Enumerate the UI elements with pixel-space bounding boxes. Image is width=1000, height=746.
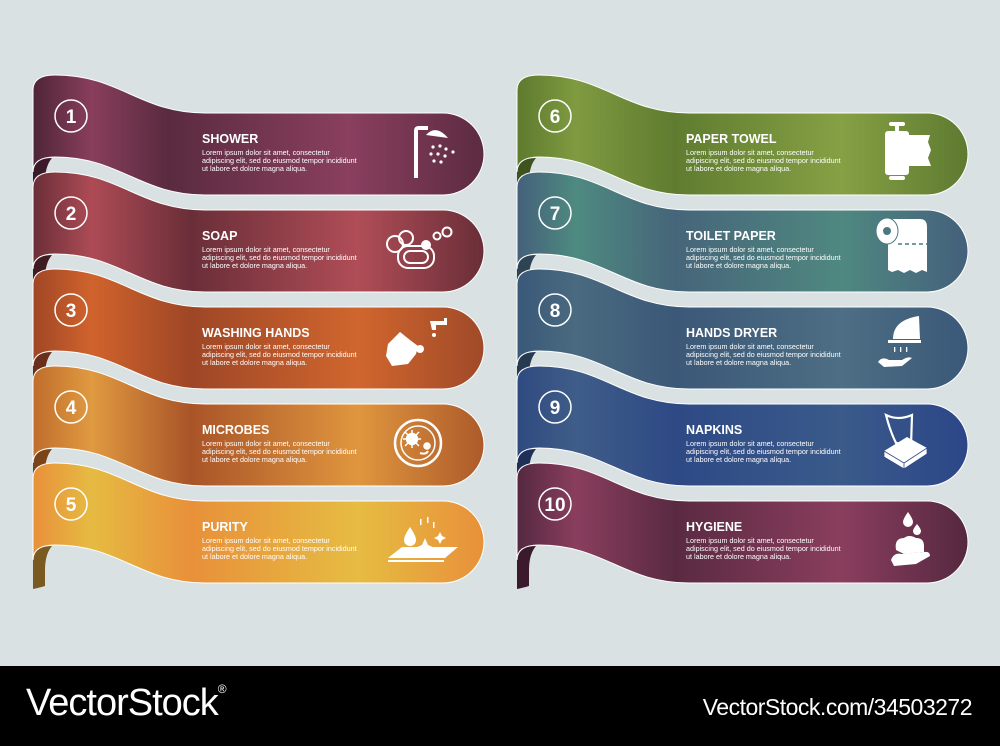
icon: soap xyxy=(387,228,452,268)
ribbon 9: napkins: Lorem ipsum dolor sit amet, consectetur xyxy=(686,439,814,448)
ribbon 6: paper towel: Lorem ipsum dolor sit amet, consectetur xyxy=(686,148,814,157)
footer bar xyxy=(0,666,1000,746)
icon: napkins box xyxy=(884,415,927,469)
icon: purity xyxy=(388,517,458,562)
ribbon 5: purity: Lorem ipsum dolor sit amet, consectetur xyxy=(202,536,330,545)
ribbon 4: microbes: 4 xyxy=(66,398,77,419)
ribbon 10: hygiene: adipiscing elit, sed do eiusmod tempor incididunt xyxy=(686,544,841,553)
ribbon 1: shower xyxy=(33,75,484,201)
ribbon 10: hygiene: 10 xyxy=(544,495,566,516)
ribbon 3: washing hands xyxy=(33,269,484,395)
ribbon 2: soap: Lorem ipsum dolor sit amet, consectetur xyxy=(202,245,330,254)
ribbon 8: hands dryer: Lorem ipsum dolor sit amet, consectetur xyxy=(686,342,814,351)
ribbon 10: hygiene: HYGIENE xyxy=(686,520,742,534)
ribbon 9: napkins: 9 xyxy=(550,398,560,419)
ribbon 5: purity: ut labore et dolore magna aliqua. xyxy=(202,552,307,561)
ribbon 7: toilet paper: Lorem ipsum dolor sit amet, consectetur xyxy=(686,245,814,254)
ribbon 10: hygiene: ut labore et dolore magna aliqua. xyxy=(686,552,791,561)
footer url: VectorStock.com/34503272 xyxy=(703,694,972,720)
ribbon 4: microbes: ut labore et dolore magna aliqua. xyxy=(202,455,307,464)
icon: hygiene xyxy=(891,512,930,566)
ribbon 2: soap xyxy=(33,172,484,298)
icon: microbes petri dish xyxy=(395,420,441,466)
ribbon 6: paper towel: PAPER TOWEL xyxy=(686,132,777,146)
ribbon 7: toilet paper xyxy=(517,172,968,298)
ribbon 5: purity: adipiscing elit, sed do eiusmod tempor incididunt xyxy=(202,544,357,553)
ribbon 8: hands dryer xyxy=(517,269,968,395)
icon: shower xyxy=(414,126,455,178)
ribbon 8: hands dryer: 8 xyxy=(550,301,560,322)
ribbon 8: hands dryer: HANDS DRYER xyxy=(686,326,777,340)
ribbon 7: toilet paper: adipiscing elit, sed do eiusmod tempor incididunt xyxy=(686,253,841,262)
ribbon 6: paper towel xyxy=(517,75,968,201)
ribbon 6: paper towel: ut labore et dolore magna aliqua. xyxy=(686,164,791,173)
ribbon 7: toilet paper: TOILET PAPER xyxy=(686,229,776,243)
icon: hands dryer xyxy=(878,316,921,367)
ribbon 1: shower: SHOWER xyxy=(202,132,258,146)
ribbon 2: soap: ut labore et dolore magna aliqua. xyxy=(202,261,307,270)
ribbon 9: napkins: ut labore et dolore magna aliqua. xyxy=(686,455,791,464)
ribbon 6: paper towel: adipiscing elit, sed do eiusmod tempor incididunt xyxy=(686,156,841,165)
ribbon 7: toilet paper: ut labore et dolore magna aliqua. xyxy=(686,261,791,270)
icon: washing hands xyxy=(386,318,447,366)
ribbon 4: microbes: Lorem ipsum dolor sit amet, consectetur xyxy=(202,439,330,448)
ribbon 4: microbes: adipiscing elit, sed do eiusmod tempor incididunt xyxy=(202,447,357,456)
ribbon 1: shower: Lorem ipsum dolor sit amet, consectetur xyxy=(202,148,330,157)
icon: toilet paper xyxy=(876,218,927,273)
ribbon 2: soap: adipiscing elit, sed do eiusmod tempor incididunt xyxy=(202,253,357,262)
ribbon 4: microbes: MICROBES xyxy=(202,423,269,437)
ribbon 10: hygiene xyxy=(517,463,968,589)
ribbon 10: hygiene: Lorem ipsum dolor sit amet, consectetur xyxy=(686,536,814,545)
ribbon 9: napkins xyxy=(517,366,968,492)
ribbon 1: shower: adipiscing elit, sed do eiusmod tempor incididunt xyxy=(202,156,357,165)
footer logo: VectorStock® xyxy=(26,682,226,724)
ribbon 5: purity xyxy=(33,463,484,589)
ribbon 3: washing hands: Lorem ipsum dolor sit amet, consectetur xyxy=(202,342,330,351)
ribbon 5: purity: 5 xyxy=(66,495,77,516)
ribbon 2: soap: SOAP xyxy=(202,229,237,243)
ribbon 8: hands dryer: ut labore et dolore magna aliqua. xyxy=(686,358,791,367)
ribbon 1: shower: 1 xyxy=(66,107,77,128)
ribbon 7: toilet paper: 7 xyxy=(550,204,560,225)
ribbon 2: soap: 2 xyxy=(66,204,76,225)
ribbon 3: washing hands: adipiscing elit, sed do eiusmod tempor incididunt xyxy=(202,350,357,359)
ribbon 3: washing hands: WASHING HANDS xyxy=(202,326,310,340)
ribbon 3: washing hands: 3 xyxy=(66,301,76,322)
ribbon 4: microbes xyxy=(33,366,484,492)
ribbon 8: hands dryer: adipiscing elit, sed do eiusmod tempor incididunt xyxy=(686,350,841,359)
ribbon 9: napkins: adipiscing elit, sed do eiusmod tempor incididunt xyxy=(686,447,841,456)
ribbon 6: paper towel: 6 xyxy=(550,107,560,128)
ribbon 9: napkins: NAPKINS xyxy=(686,423,742,437)
icon: paper towel xyxy=(885,122,931,180)
ribbon 3: washing hands: ut labore et dolore magna aliqua. xyxy=(202,358,307,367)
ribbon 1: shower: ut labore et dolore magna aliqua. xyxy=(202,164,307,173)
ribbon 5: purity: PURITY xyxy=(202,520,248,534)
